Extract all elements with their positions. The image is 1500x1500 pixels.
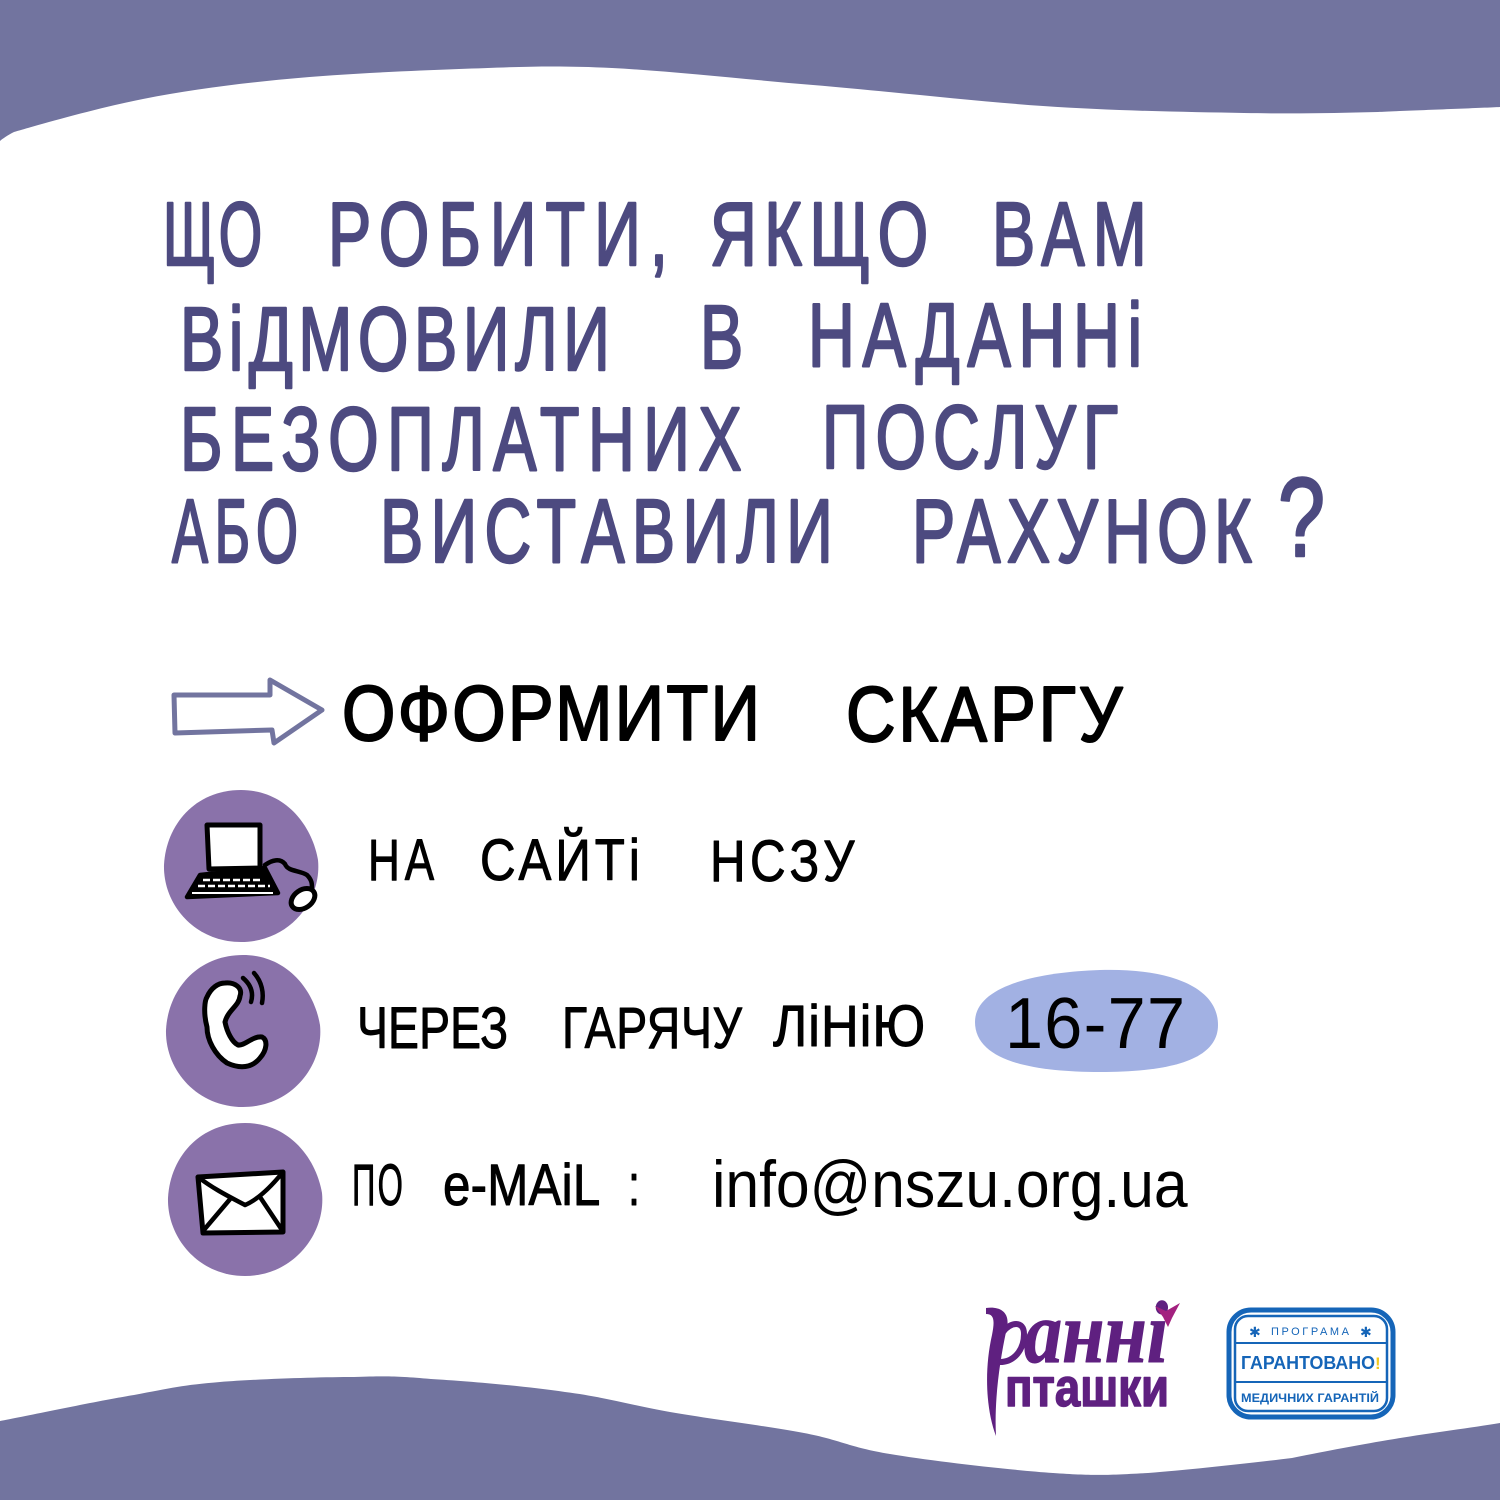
- website row text: НА: [368, 827, 435, 892]
- heading: file a complaint: СКАРГУ: [846, 670, 1124, 758]
- title: РАХУНОК: [912, 481, 1252, 582]
- title: ЯКЩО: [710, 184, 928, 285]
- stamp: Програма гарантовано: ПРОГРАМА: [1271, 1326, 1350, 1338]
- hotline number pill: [975, 970, 1218, 1072]
- title: ПОСЛУГ: [822, 387, 1118, 488]
- website row text: САЙТі: [480, 827, 640, 893]
- title: ВИСТАВИЛИ: [380, 481, 833, 582]
- title: ВАМ: [992, 184, 1147, 285]
- heading: file a complaint: [342, 669, 1124, 758]
- email row text: [352, 1149, 1188, 1222]
- email row text: ПО: [352, 1152, 403, 1217]
- bottom wave band: [0, 1376, 1500, 1500]
- title: НАДАННі: [808, 285, 1142, 386]
- title: В: [700, 287, 743, 388]
- title: АБО: [172, 481, 298, 581]
- arrow: [174, 680, 322, 743]
- logo: Ранні пташки: анні: [1024, 1285, 1168, 1382]
- hotline row text: ЛіНіЮ: [773, 993, 925, 1059]
- title: ЩО: [163, 183, 262, 284]
- top wave band: [0, 0, 1500, 141]
- hotline row text: [357, 993, 925, 1061]
- hotline row text: ЧЕРЕЗ: [357, 996, 508, 1061]
- stamp: Програма гарантовано: ГАРАНТОВАНО: [1241, 1353, 1375, 1373]
- title: [163, 183, 1325, 582]
- title: ВіДМОВИЛИ: [180, 289, 610, 390]
- stamp: Програма гарантовано: ✱: [1249, 1324, 1261, 1340]
- email row text: info@nszu.org.ua: [712, 1149, 1188, 1222]
- email row text: е-MAiL: [443, 1153, 600, 1218]
- hotline row text: ГАРЯЧУ: [562, 996, 743, 1061]
- website row text: НСЗУ: [710, 829, 855, 894]
- logo: Ранні пташки: [986, 1285, 1180, 1436]
- stamp: Програма гарантовано: [1229, 1310, 1393, 1417]
- icon: laptop: [164, 790, 319, 942]
- logo: Ранні пташки: пташки: [1005, 1358, 1169, 1418]
- icon: phone: [166, 955, 320, 1107]
- hotline number pill: 16-77: [1005, 982, 1185, 1063]
- icon: envelope: [168, 1123, 322, 1276]
- title: РОБИТИ,: [328, 184, 668, 285]
- heading: file a complaint: ОФОРМИТИ: [342, 669, 760, 757]
- title: БЕЗОПЛАТНИХ: [180, 389, 742, 490]
- email row text: :: [628, 1153, 640, 1218]
- stamp: Програма гарантовано: !: [1375, 1354, 1381, 1373]
- stamp: Програма гарантовано: ✱: [1360, 1324, 1372, 1340]
- title: ?: [1278, 455, 1325, 580]
- stamp: Програма гарантовано: МЕДИЧНИХ ГАРАНТІЙ: [1241, 1390, 1379, 1405]
- website row text: [368, 827, 855, 894]
